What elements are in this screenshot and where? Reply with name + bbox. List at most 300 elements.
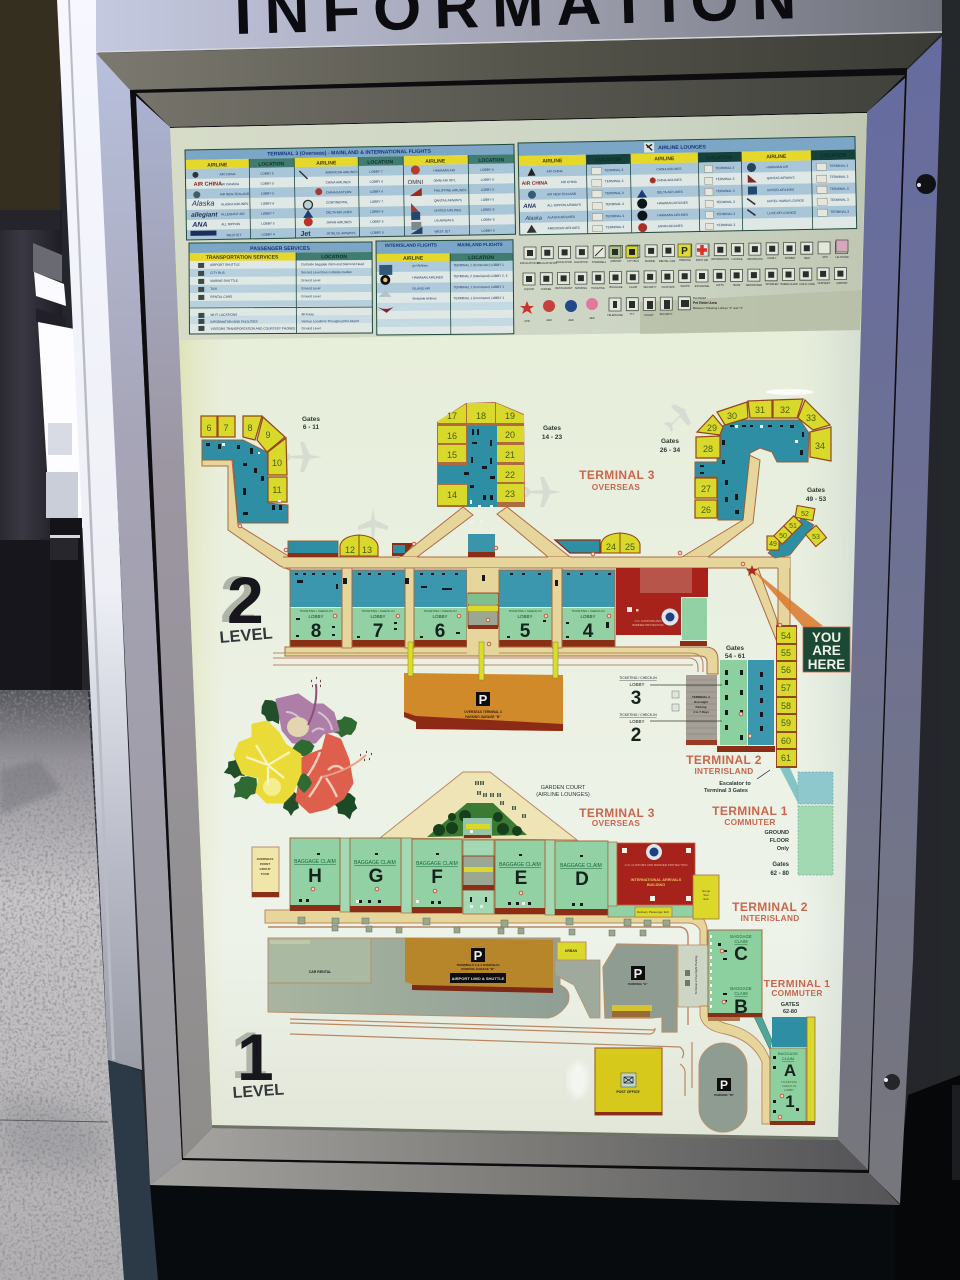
legend icons row 1: INFORMATION	[711, 257, 729, 261]
level 1 indicator: 1	[231, 1018, 268, 1092]
level 1 indicator: 1	[237, 1020, 274, 1094]
level 1: group tour box: GROUP	[259, 867, 271, 871]
level 1: group tour box: TOUR	[261, 872, 270, 876]
lobby 4	[562, 570, 615, 647]
table: airline lounges: TERMINAL 3	[605, 191, 624, 195]
level 1: international arrivals building: Exit	[703, 897, 709, 901]
legend icons row 2: CUSTOMS	[662, 285, 675, 289]
table: Terminal 3 airlines: LOBBY 4	[370, 190, 383, 194]
legend icons row 1: ESCALATOR DN	[537, 261, 557, 265]
gates 54-61 column: 59	[781, 718, 791, 728]
lobby 7: LOBBY	[370, 614, 386, 619]
table: airline lounges: TERMINAL 3	[716, 212, 735, 216]
map text labels level 2: Gates	[661, 438, 679, 445]
table: airline lounges: TERMINAL 3	[716, 177, 735, 181]
level 1: parking garage	[405, 938, 553, 993]
table: passenger services: LOCATION	[321, 254, 347, 260]
kiosk pillar left edge	[57, 0, 158, 1280]
legend icons row 2: BANK	[733, 283, 741, 287]
table: airline lounges: TERMINAL 3	[606, 225, 625, 229]
terminal 2 interisland building: TERMINAL 2	[692, 695, 710, 699]
level 1: parking C: P	[634, 966, 643, 981]
table: passenger services: Second Level Ewa curbside median	[301, 270, 352, 274]
table: Terminal 3 airlines: LOBBY 4	[370, 180, 383, 184]
table: Terminal 3 airlines: AIRLINE	[207, 162, 228, 169]
table: airline lounges: TERMINAL 3	[715, 166, 734, 170]
baggage claim E: BAGGAGE CLAIM	[499, 862, 541, 868]
lobby 7	[352, 570, 405, 647]
gates 49-53 concourse: 52	[801, 511, 809, 518]
table: airline lounges: TERMINAL 3	[830, 210, 849, 214]
table: Terminal 3 airlines: JETBLUE AIRWAYS	[326, 231, 356, 236]
level 1: baggage claim B and C: CLAIM	[734, 939, 748, 944]
gates 12-13 and side blocks: 13	[362, 545, 372, 555]
table: airline lounges: HAWAIIAN AIRLINES	[657, 201, 688, 205]
table: airline lounges: TERMINAL 3	[605, 179, 624, 183]
gates 26-34 concourse: 31	[755, 405, 765, 415]
legend icons row 2: LIQUOR	[524, 287, 534, 291]
table: passenger services	[189, 242, 372, 334]
legend icons row 1: FIRST AID	[696, 258, 708, 262]
table: Terminal 3 airlines: UNITED AIRLINES	[434, 208, 461, 213]
callout: you are here: HERE	[808, 657, 845, 672]
table: Terminal 3 airlines: LOBBY 8	[481, 208, 495, 212]
table: airline lounges: ANA	[522, 204, 536, 210]
level 1: baggage claim B and C: B	[734, 997, 748, 1018]
table: passenger services: CITY BUS	[210, 271, 225, 275]
table: Terminal 3 airlines: WESTJET	[226, 233, 241, 237]
table: Terminal 3 airlines: HAWAIIAN AIR	[433, 168, 456, 173]
table: airline lounges: HAWAIIAN AIRLINES	[657, 213, 688, 217]
map text labels level 1	[536, 785, 830, 1015]
gates 26-34 concourse: 26	[701, 505, 711, 515]
legend icons row 1: AIRPORT	[610, 259, 622, 263]
lobby 3 and 2 labels: 2	[631, 725, 641, 746]
legend icons row 2: TICKETING	[591, 286, 605, 290]
lobby 3 and 2 labels: LOBBY	[629, 719, 645, 724]
level 1: baggage claim B and C: BAGGAGE	[730, 934, 752, 939]
table: airline lounges: QANTAS AIRWAYS	[767, 176, 795, 180]
table: interisland and mainland flights: Mokulele Airlines	[412, 296, 437, 301]
table: airline lounges: TERMINAL 3	[716, 200, 735, 204]
map text labels level 2	[302, 416, 826, 794]
table: airline lounges: TERMINAL 3	[605, 202, 624, 206]
gates 6-11 concourse: 10	[272, 458, 282, 468]
table: airline lounges: UNITED AIRLINES	[767, 188, 794, 192]
airplane watermarks	[284, 404, 695, 546]
gates 54-61 column: 55	[781, 648, 791, 658]
map text labels level 1: GATES	[781, 1002, 800, 1008]
map text labels level 2: Gates	[302, 416, 320, 423]
level 1: terminal 1 commuter: CLAIM	[782, 1056, 794, 1061]
map text labels level 2: Gates	[726, 645, 744, 652]
legend icons row 1: ELEVATOR	[574, 260, 588, 264]
gates 54-61 column	[776, 625, 797, 768]
legend icons row 3: FLIGHT	[644, 313, 654, 317]
legend icons row 3: Between Ticketing Lobbys "2" and "3"	[693, 306, 743, 310]
map text labels level 1: 62-80	[783, 1009, 797, 1015]
table: airline lounges: JAPAN AIRLINES	[658, 224, 683, 228]
international arrivals block level 2: U.S. CUSTOMS AND	[635, 619, 661, 623]
table: Terminal 3 airlines: ALLEGIANT AIR	[221, 212, 245, 216]
table: airline lounges: AIRLINE LOUNGES	[658, 144, 707, 151]
table: airline lounges	[518, 137, 857, 235]
legend icons row 1: LEI STAND	[835, 255, 849, 259]
lobby 3 and 2 labels	[619, 676, 722, 746]
level 1: international arrivals building: Group	[702, 889, 710, 893]
table: interisland and mainland flights: LOCATION	[468, 255, 494, 261]
gates 24-25: 25	[625, 542, 635, 552]
level 1: terminal 1 commuter: BAGGAGE	[778, 1051, 798, 1056]
baggage claim D: D	[575, 869, 589, 890]
table: interisland and mainland flights	[376, 240, 514, 335]
table: interisland and mainland flights: HAWAIIAN AIRLINES	[412, 275, 443, 280]
legend icons row 2: GIFTS	[716, 283, 724, 287]
map text labels level 1: (AIRLINE LOUNGES)	[536, 792, 590, 798]
lobby 4: 4	[583, 621, 594, 642]
table: airline lounges: AIRLINE	[542, 158, 563, 165]
table: airline lounges: AIR NEW ZEALAND	[547, 192, 577, 196]
terminal 2 interisland building: Overnight	[694, 700, 708, 704]
header area of directory	[170, 113, 867, 340]
legend icons row 3: CPR	[524, 319, 530, 323]
legend icons row 1: ESCALATOR	[556, 260, 572, 264]
lobbies level 2	[290, 568, 615, 654]
terminal 2 interisland building: 4 to 7 Days	[693, 710, 709, 714]
level 1: international arrivals building: U.S. CUSTOMS AND BORDER PROTECTION	[625, 863, 687, 867]
table: airline lounges: LOCATION	[706, 155, 733, 161]
level 1: international arrivals building: Delivery Passenger Exit	[637, 910, 669, 914]
level 2 indicator	[219, 562, 273, 647]
table: passenger services: INFORMATION AND FACILITIES	[210, 320, 258, 324]
lobby 6: 6	[435, 621, 445, 642]
level 1: baggage claim B and C: BAGGAGE	[730, 986, 752, 991]
baggage claim H: H	[308, 866, 322, 887]
map text labels level 2: 49 - 53	[806, 496, 826, 503]
table: Terminal 3 airlines: AIR CANADA	[220, 182, 240, 186]
table: Terminal 3 airlines: DELTA AIR LINES	[326, 210, 352, 215]
screw bottom right	[884, 1074, 900, 1090]
level 1: terminal 1 commuter: TICKETING	[781, 1080, 798, 1084]
table: Terminal 3 airlines: LOBBY 5	[481, 188, 494, 192]
table: airline lounges: DELTA AIR LINES	[657, 190, 683, 194]
lobby 5: LOBBY	[517, 614, 533, 619]
level 1: terminal 2 parking box: Terminal 2 Overnight Parking	[694, 955, 698, 994]
table: airline lounges: ALL NIPPON AIRWAYS	[547, 203, 581, 207]
lobby 6	[414, 570, 467, 647]
map text labels level 1: GROUND	[765, 830, 789, 836]
table: passenger services: Ground Level	[301, 286, 321, 290]
table: Terminal 3 airlines	[185, 144, 516, 240]
table: airline lounges: AIRLINE	[654, 156, 675, 162]
gates 6-11 concourse: 7	[223, 423, 229, 433]
table: airline lounges: TERMINAL 3	[830, 198, 849, 202]
baggage claim F	[412, 839, 462, 913]
table: Terminal 3 airlines: LOBBY 4	[261, 232, 275, 237]
level 1: car rental and parking lot	[268, 938, 569, 1018]
map text labels level 1: FLOOR	[770, 838, 789, 844]
you are here pointer	[752, 569, 823, 628]
table: Terminal 3 airlines: LOBBY 5	[481, 198, 494, 202]
map text labels level 2: Gates	[807, 487, 825, 494]
level 1: terminal 1 commuter: CHECK-IN	[782, 1084, 796, 1088]
level 1: group tour box: FRONT	[260, 862, 270, 866]
lobby 8: TICKETING / CHECK-IN	[299, 609, 333, 613]
legend icons row 2: RESTAURANT	[555, 286, 573, 290]
gates 24-25: 24	[606, 542, 616, 552]
legend icons row 2: SHOPS	[680, 284, 690, 288]
gates 14-23 concourse: 19	[505, 411, 515, 421]
table: Terminal 3 airlines: JAPAN AIRLINES	[326, 220, 352, 225]
map text labels level 2: Terminal 3 Gates	[704, 788, 748, 794]
gates 26-34 concourse	[695, 399, 831, 520]
lobby 3 and 2 labels: TICKETING / CHECK-IN	[619, 676, 657, 680]
gates 6-11 concourse: 9	[265, 430, 271, 440]
legend icons row 1: STAIRWELL	[592, 260, 607, 264]
table: Terminal 3 airlines: CONTINENTAL	[326, 200, 348, 205]
level 1: oval parking: P	[720, 1078, 728, 1092]
level 1: oval parking	[699, 1043, 747, 1132]
level 1: post office: POST OFFICE	[616, 1090, 640, 1094]
map text labels level 2: TERMINAL 2	[686, 753, 762, 767]
level 1: international arrivals building: BUILDING	[647, 883, 665, 887]
table: airline lounges: AMERICAN AIRLINES	[548, 226, 580, 230]
legend icons row 1: FAMILY	[767, 256, 777, 260]
legend icons row 3: AED	[589, 316, 595, 320]
table: Terminal 3 airlines: ALL NIPPON	[221, 222, 241, 226]
lobby 3 and 2 labels: LOBBY	[629, 682, 645, 687]
map text labels level 1: Gates	[772, 862, 790, 868]
table: Terminal 3 airlines: LOCATION	[478, 157, 505, 164]
level 1: parking C: PARKING "G"	[628, 982, 648, 986]
lobby 5: TICKETING / CHECK-IN	[508, 609, 542, 613]
gates 6-11 concourse: 11	[272, 485, 282, 495]
table: passenger services: MARINE SHUTTLE	[210, 279, 238, 283]
table: Terminal 3 airlines: CHINA EASTERN	[326, 190, 352, 195]
baggage claim E: E	[515, 868, 527, 889]
table: interisland and mainland flights: ISLAND AIR	[412, 287, 431, 291]
table: airline lounges: TERMINAL 3	[717, 223, 736, 227]
map text labels level 2: INTERISLAND	[694, 766, 754, 776]
gates 14-23 concourse: 16	[447, 431, 457, 441]
table: passenger services: TRANSPORTATION SERVICES	[206, 255, 279, 261]
gates 14-23 concourse: 14	[447, 490, 457, 500]
red location pins	[238, 524, 784, 1119]
legend icons row 2: WHEELCHAIR	[780, 282, 798, 286]
lobby 8: LOBBY	[308, 614, 324, 619]
map text labels level 1: TERMINAL 1	[712, 804, 788, 818]
hibiscus illustration	[220, 678, 372, 822]
table: airline lounges: TERMINAL 3	[716, 189, 735, 193]
baggage claim G: G	[369, 866, 383, 887]
table: airline lounges: Alaska	[524, 216, 542, 222]
legend icons row 1: RESTROOM	[748, 257, 762, 261]
callout: you are here: YOU	[812, 630, 841, 645]
lobby 7: 7	[373, 621, 383, 642]
lobby 5	[499, 570, 552, 647]
legend icons row 3: SECURITY	[659, 312, 673, 316]
legend icons row 2: NEWSSTAND	[746, 283, 762, 287]
level 1: parking garage: AIRPORT LIMO & SHUTTLE	[452, 976, 505, 981]
table: airline lounges: AIR CHINA	[561, 180, 578, 184]
international arrivals block level 2: BORDER PROTECTION	[632, 623, 664, 627]
gates 6-11 concourse: 8	[247, 423, 253, 433]
glare reflections	[568, 389, 814, 1098]
map text labels level 1: COMMUTER	[771, 988, 823, 998]
table: airline lounges: AIR CHINA	[522, 180, 548, 187]
flower: red	[297, 735, 372, 812]
gates 6-11 concourse: 6	[206, 423, 212, 433]
gates 54-61 column: 56	[781, 665, 791, 675]
level 1: terminal 2 parking box	[678, 945, 708, 1007]
gates 49-53 concourse: 53	[812, 534, 820, 541]
gates 49-53 concourse: 50	[779, 533, 787, 540]
table: Terminal 3 airlines: ALASKA AIRLINES	[221, 202, 248, 206]
roads level 2	[273, 653, 703, 672]
lobby 7: TICKETING / CHECK-IN	[361, 609, 395, 613]
map text labels level 2: 54 - 61	[725, 653, 745, 660]
legend icons row 1: MARINE	[645, 259, 655, 263]
legend icons row 2: SECURITY	[643, 285, 657, 289]
table: Terminal 3 airlines: WEST JET	[434, 229, 450, 234]
legend icons row 1: MEN	[804, 256, 810, 260]
legend icons row 1: RENTAL CAR	[659, 259, 675, 263]
legend icons row 2: SMOKING	[575, 286, 587, 290]
table: passenger services: VISITORS TRANSPORTATION AND COURTESY PHONES	[210, 326, 295, 331]
table: Terminal 3 airlines: AIRLINE	[425, 158, 446, 165]
terminal 2 interisland building	[686, 660, 775, 752]
table: airline lounges: LOCATION	[820, 153, 847, 159]
leaf: under yellow flower	[296, 773, 312, 793]
level 1: terminal 1 commuter: LOBBY	[784, 1088, 794, 1092]
leaf: center between flowers	[290, 737, 316, 759]
map text labels level 1: GARDEN COURT	[541, 785, 586, 791]
gates 12-13 and side blocks	[288, 534, 600, 557]
table: passenger services: All Areas	[301, 312, 314, 316]
gates 6-11 concourse	[201, 416, 288, 523]
baggage claim H	[290, 838, 340, 911]
table: airline lounges: ALASKA AIRLINES	[547, 215, 575, 219]
level 1: post office	[595, 1048, 662, 1115]
level 1 indicator: LEVEL	[232, 1081, 285, 1102]
table: Terminal 3 airlines: QANTAS AIRWAYS	[434, 198, 462, 203]
level 1: baggage claim B and C	[708, 930, 762, 1021]
table: passenger services: RENTAL CARS	[210, 295, 232, 299]
legend icons row 1: WOMEN	[785, 256, 795, 260]
lobby 6: TICKETING / CHECK-IN	[423, 609, 457, 613]
level 1: parking garage: P	[474, 948, 483, 963]
gates 26-34 concourse: 28	[703, 444, 713, 454]
terminal 2 interisland building: Parking	[695, 705, 707, 709]
baggage claim G: BAGGAGE CLAIM	[354, 860, 396, 866]
gates 26-34 concourse: 32	[780, 405, 790, 415]
gates 49-53 concourse: 49	[769, 541, 777, 548]
gates 24-25	[601, 533, 640, 553]
callout: you are here	[803, 627, 850, 672]
legend icons row 2: EXCHANGE	[695, 284, 710, 288]
baggage claim D: BAGGAGE CLAIM	[560, 863, 602, 869]
level 1: oval parking: PARKING "M"	[714, 1093, 734, 1097]
table: Terminal 3 airlines: AIRLINE	[316, 160, 337, 167]
legend icons row 1: CITY BUS	[627, 259, 639, 263]
level 1: corridor to terminal 1	[700, 1006, 770, 1124]
table: Terminal 3 airlines: US AIRWAYS	[434, 218, 454, 223]
map text labels level 2: OVERSEAS	[592, 482, 640, 492]
table: airline lounges: TERMINAL 3	[605, 168, 623, 172]
lobby 6: LOBBY	[432, 614, 448, 619]
table: Terminal 3 airlines: LOBBY 7	[369, 170, 383, 174]
icon: you are here star	[746, 565, 758, 576]
level 2 indicator: 2	[227, 563, 264, 637]
gates 14-23 concourse	[437, 402, 525, 507]
table: Terminal 3 airlines: LOBBY 4	[481, 178, 494, 182]
level 1: lava box and lots: URBAN	[565, 949, 578, 953]
lobby 3 and 2 labels: 3	[631, 688, 641, 709]
legend icons row 3: TELEPHONE	[607, 313, 623, 317]
map text labels level 1: TERMINAL 2	[732, 900, 808, 914]
gates 26-34 concourse: 29	[707, 423, 717, 433]
table: interisland and mainland flights: MAINLAND FLIGHTS	[457, 242, 503, 247]
level 1: group tour box	[252, 847, 279, 897]
level 1: terminal 1 commuter: A	[784, 1061, 796, 1080]
table: Terminal 3 airlines: LOBBY 7	[261, 211, 275, 216]
table: airline lounges: TERMINAL 3	[830, 187, 849, 191]
baggage claim F: BAGGAGE CLAIM	[416, 861, 458, 867]
gates 12-13 and side blocks: 12	[345, 545, 355, 555]
poster	[170, 113, 867, 1140]
international arrivals block level 2	[616, 568, 708, 646]
gates 54-61 column: 61	[781, 753, 791, 763]
flower: purple	[277, 678, 338, 742]
table: airline lounges: HOTEL HAWAII LOUNGE	[767, 199, 804, 203]
table: interisland and mainland flights: INTERISLAND FLIGHTS	[385, 242, 437, 248]
table: airline lounges: TERMINAL 3	[829, 164, 848, 168]
flower: yellow	[235, 722, 300, 802]
gates 49-53 concourse	[767, 506, 827, 558]
legend icons row 2: NURSERY	[818, 281, 831, 285]
table: Terminal 3 airlines: OMNI AIR INTL	[434, 178, 456, 183]
parking garage level 2: PARKING GARAGE "B"	[465, 715, 501, 719]
gates 14-23 concourse: 23	[505, 489, 515, 499]
terminal 1 ground floor outline	[780, 768, 833, 875]
table: Terminal 3 airlines: LOBBY 4	[480, 168, 494, 172]
gates 14-23 concourse: 17	[447, 411, 457, 421]
callout: you are here: ARE	[812, 643, 841, 658]
table: Terminal 3 airlines: TERMINAL 3 (Overseas) - MAINLAND & INTERNATIONAL FLIGHTS	[267, 149, 432, 158]
legend icons row 1: P	[681, 246, 688, 257]
table: Terminal 3 airlines: OMNI	[408, 180, 424, 186]
table: passenger services: Ground Level	[301, 294, 321, 298]
baggage claim H: BAGGAGE CLAIM	[294, 859, 336, 865]
gates 14-23 concourse: 20	[505, 430, 515, 440]
lobby 5: 5	[520, 621, 531, 642]
level 2 indicator: 2	[220, 562, 257, 636]
level 2 indicator: LEVEL	[219, 624, 273, 647]
table: Terminal 3 airlines: LOCATION	[258, 161, 285, 168]
legend icons row 3: TTY	[630, 312, 635, 316]
table: passenger services: TAXI	[210, 287, 217, 291]
table: Terminal 3 airlines: AIR CHINA	[219, 172, 236, 176]
legend icons row 2: COFFEE	[541, 287, 552, 291]
gates 14-23 concourse: 22	[505, 470, 515, 480]
gates 54-61 column: 54	[781, 631, 791, 641]
table: airline lounges: AIR CHINA	[547, 169, 564, 173]
table: interisland and mainland flights: TERMINAL 1 (Commuter) LOBBY 1	[453, 263, 504, 267]
gates 54-61 column: 57	[781, 683, 791, 693]
legend icons row 2: CLAIM	[629, 285, 637, 289]
level 1: tan roadway and lines	[265, 910, 707, 1096]
gates 49-53 concourse: 51	[789, 523, 797, 530]
